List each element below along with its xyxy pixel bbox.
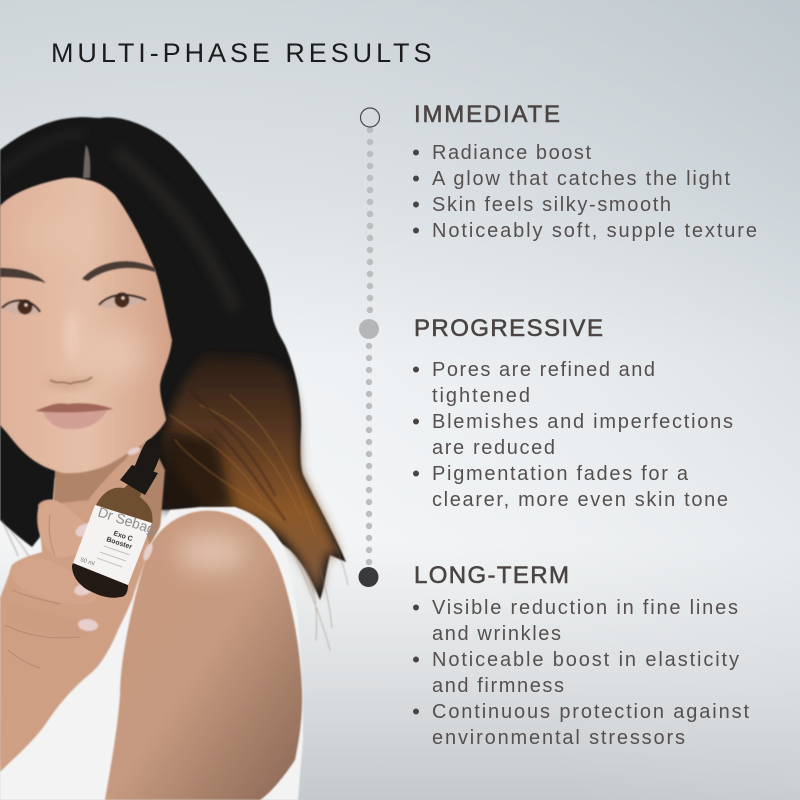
bottle shoulders [96,483,152,525]
heading: long-term: LONG-TERM [414,562,569,589]
title: MULTI-PHASE RESULTS [51,38,434,68]
list: progressive: Pigmentation fades for a [432,463,689,485]
serum bottle: 50 ml [79,557,95,567]
dotted line [369,130,370,563]
list: long-term: and firmness [432,675,564,697]
forehead and cheek light [90,329,146,381]
index finger [37,500,98,557]
face [0,178,172,473]
neck [50,440,165,620]
section: long-term [413,562,749,749]
fingernails [73,446,155,632]
marker: immediate [360,108,380,127]
list: progressive: are reduced [432,437,555,459]
hand [0,446,155,772]
heading: immediate: IMMEDIATE [414,101,560,128]
hair strands [2,390,348,650]
list: long-term: Continuous protection against [432,701,749,723]
list: progressive: tightened [432,385,530,407]
list: long-term: Noticeable boost in elasticity [432,649,739,671]
list: progressive: Pores are refined and [432,359,655,381]
serum bottle [72,439,162,598]
middle finger [10,558,100,604]
marker: long-term [358,567,378,587]
list: progressive: Blemishes and imperfections [432,411,733,433]
list: immediate: Noticeably soft, supple texture [432,220,757,242]
serum bottle: Booster [105,536,133,551]
list: long-term [413,597,749,749]
serum bottle: Exo C [112,530,133,543]
list: immediate: A glow that catches the light [432,168,730,190]
timeline [358,108,380,587]
list: progressive [413,359,733,511]
cap and dropper [120,465,158,495]
ring finger shading [4,602,93,637]
list: immediate: Radiance boost [432,142,591,164]
nose [65,309,79,361]
parting [83,145,90,178]
dark under-layer near neck [160,430,235,512]
serum bottle: Dr Sebag [96,504,157,537]
list: long-term: environmental stressors [432,727,685,749]
section: progressive [413,315,733,511]
white top [0,507,303,800]
lips [35,403,113,429]
eyebrows [0,261,155,283]
list: long-term: Visible reduction in fine lines [432,597,738,619]
hair [0,117,348,650]
list: progressive: clearer, more even skin tone [432,489,728,511]
eyes [2,292,146,315]
bottle base [72,563,128,598]
list: immediate [413,142,757,242]
photo: woman holding serum bottle [0,117,348,800]
brown lengths [165,355,340,596]
shoulder and arm [105,511,302,800]
heading: progressive: PROGRESSIVE [414,315,603,342]
list: long-term: and wrinkles [432,623,561,645]
knuckle lines [5,515,80,668]
label [73,505,152,585]
marker: progressive [359,319,379,339]
list: immediate: Skin feels silky-smooth [432,194,671,216]
section: immediate [413,101,757,242]
hair sheen [115,150,235,310]
shoulder highlight [176,532,248,572]
